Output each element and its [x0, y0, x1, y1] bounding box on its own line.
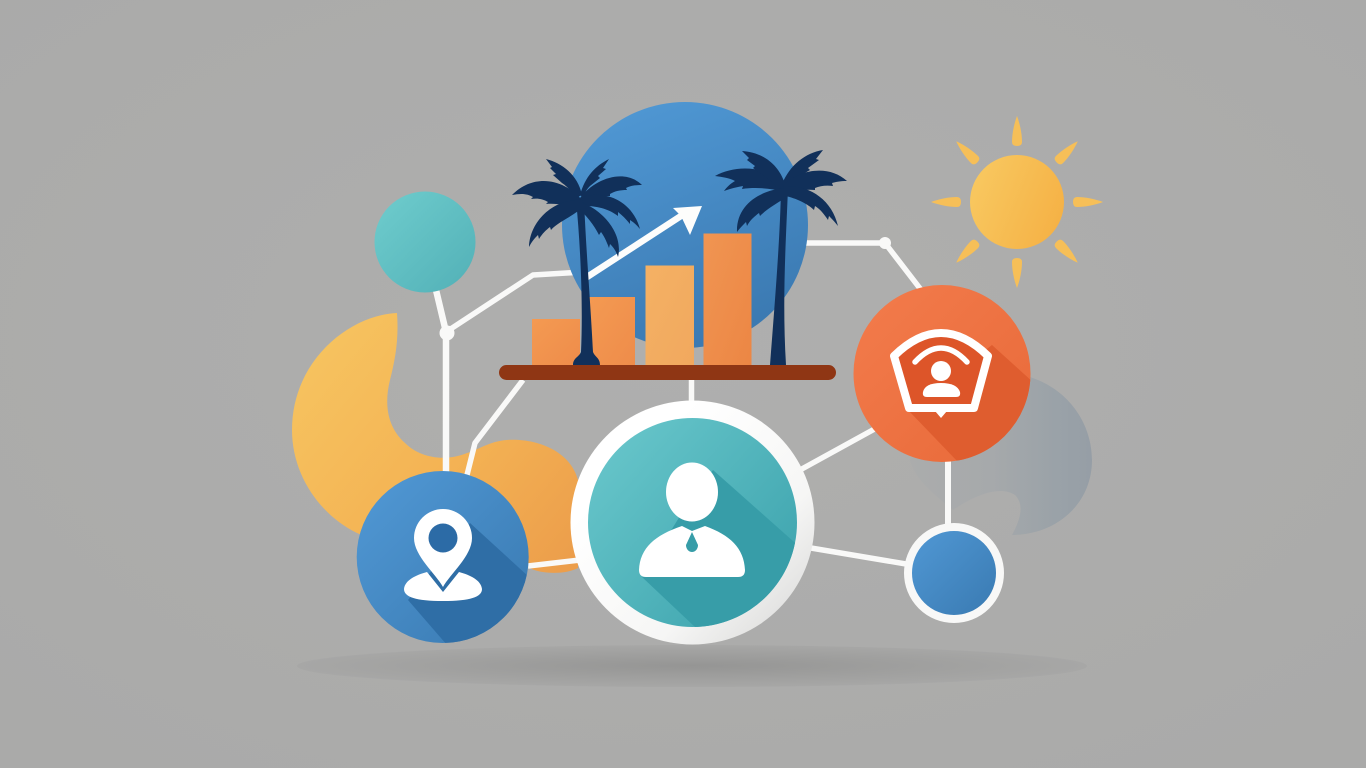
- bar chart: [532, 234, 752, 366]
- icon: wifi person shield: [894, 333, 988, 418]
- left palm tree: [512, 159, 642, 365]
- icon: location pin: [404, 509, 482, 601]
- sun: [931, 116, 1103, 288]
- growth arrow: [584, 206, 702, 279]
- small blue circle node: [908, 527, 1000, 619]
- right palm tree: [715, 150, 847, 365]
- teal small circle: [374, 192, 476, 292]
- network nodes: [440, 237, 891, 340]
- yellow crescent blob: [292, 313, 578, 573]
- orange circle with wifi shield icon: [854, 285, 1030, 462]
- ground shadow: [297, 645, 1087, 687]
- teal person circle: [570, 400, 820, 660]
- grey swirl blob: [910, 377, 1092, 535]
- icon: person: [639, 462, 745, 577]
- network connection lines: [436, 243, 948, 566]
- large blue circle: [562, 102, 808, 348]
- blue location circle: [356, 471, 529, 643]
- shelf: [499, 365, 836, 380]
